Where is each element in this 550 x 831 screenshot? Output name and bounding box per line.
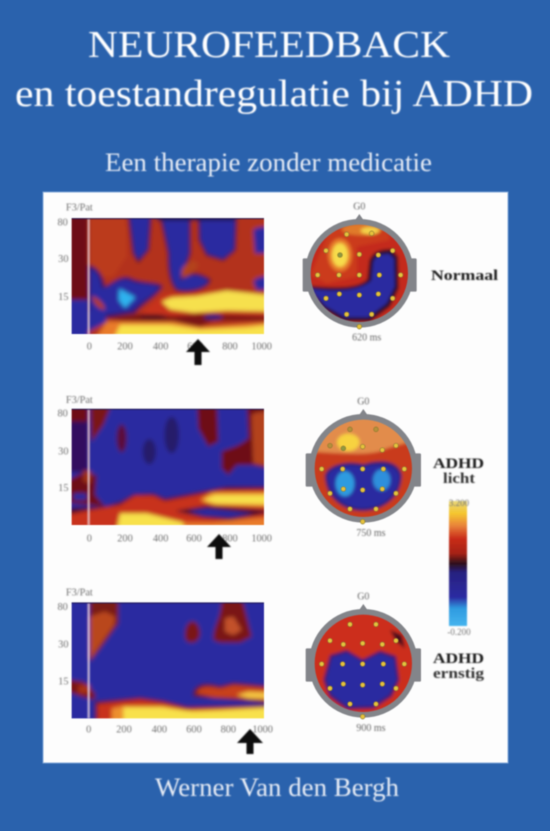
- axis labels: 1000: [252, 725, 273, 736]
- arrow: ADHD licht: [207, 534, 231, 559]
- axis labels: 80: [58, 408, 68, 419]
- axis labels: 1000: [251, 341, 272, 352]
- axis labels: 1000: [251, 534, 272, 545]
- head labels: [352, 201, 381, 344]
- axis labels: F3/Pat: [66, 203, 93, 214]
- electrodes: [319, 622, 407, 719]
- label: ADHD ernstig: ernstig: [433, 666, 485, 682]
- spectrogram: normaal: [58, 203, 277, 352]
- axis labels: 600: [186, 725, 202, 736]
- spectrogram: ADHD licht: [58, 395, 277, 545]
- head labels: 900 ms: [356, 723, 386, 734]
- head labels: G0: [357, 591, 369, 602]
- axis labels: 800: [222, 341, 238, 352]
- author: Werner Van den Bergh: [155, 773, 399, 802]
- axis labels: 600: [186, 534, 202, 545]
- axis labels: 80: [58, 602, 68, 613]
- head labels: G0: [353, 201, 365, 212]
- colour scale: 3.200: [449, 498, 470, 508]
- axis labels: 400: [153, 534, 168, 545]
- axis labels: F3/Pat: [66, 588, 93, 599]
- label: Normaal: Normaal: [431, 268, 498, 284]
- spectrogram: ADHD ernstig: [58, 588, 277, 736]
- title: en toestandregulatie bij ADHD: [15, 73, 533, 115]
- axis labels: 30: [58, 446, 68, 457]
- time zero marker: [87, 603, 90, 718]
- axis labels: 200: [117, 534, 133, 545]
- axis labels: 800: [222, 534, 238, 545]
- head labels: [356, 591, 386, 734]
- axis labels: 30: [58, 254, 68, 265]
- electrodes: [319, 427, 407, 524]
- head map: ADHD licht: [305, 396, 422, 539]
- head labels: [356, 396, 386, 539]
- axis labels: 200: [116, 725, 132, 736]
- title: [15, 24, 533, 115]
- title: NEUROFEEDBACK: [88, 24, 451, 66]
- time zero marker: [87, 409, 90, 525]
- axis labels: 15: [58, 483, 68, 494]
- label: ADHD ernstig: [433, 651, 485, 682]
- axis labels: 0: [87, 534, 92, 545]
- axis labels: 400: [152, 725, 167, 736]
- axis labels: 15: [58, 292, 68, 303]
- colour scale: [447, 498, 471, 637]
- axis labels: 30: [58, 639, 68, 650]
- axis labels: 600: [187, 341, 203, 352]
- head labels: 750 ms: [356, 528, 386, 539]
- colour scale: -0.200: [447, 627, 471, 637]
- head labels: G0: [357, 396, 369, 407]
- axis labels: 80: [58, 217, 68, 228]
- axis labels: [58, 203, 272, 352]
- arrow: normaal: [186, 339, 210, 365]
- axis labels: 15: [58, 677, 68, 688]
- axis labels: [58, 395, 272, 545]
- label: ADHD licht: licht: [443, 471, 475, 487]
- label: ADHD licht: ADHD: [433, 456, 484, 472]
- axis labels: 0: [87, 341, 92, 352]
- axis labels: [58, 588, 273, 736]
- label: ADHD licht: [433, 456, 484, 487]
- head map: normaal: [301, 201, 418, 344]
- axis labels: 800: [221, 725, 236, 736]
- head labels: 620 ms: [352, 333, 381, 344]
- white panel: [43, 192, 508, 763]
- axis labels: 0: [86, 725, 91, 736]
- axis labels: 200: [117, 341, 133, 352]
- arrow: ADHD ernstig: [237, 729, 263, 754]
- electrodes: [315, 231, 403, 329]
- head map: ADHD ernstig: [305, 591, 422, 734]
- time zero marker: [87, 218, 90, 334]
- label: ADHD ernstig: ADHD: [433, 651, 484, 667]
- subtitle: Een therapie zonder medicatie: [105, 148, 432, 177]
- axis labels: F3/Pat: [66, 395, 93, 406]
- axis labels: 400: [153, 341, 168, 352]
